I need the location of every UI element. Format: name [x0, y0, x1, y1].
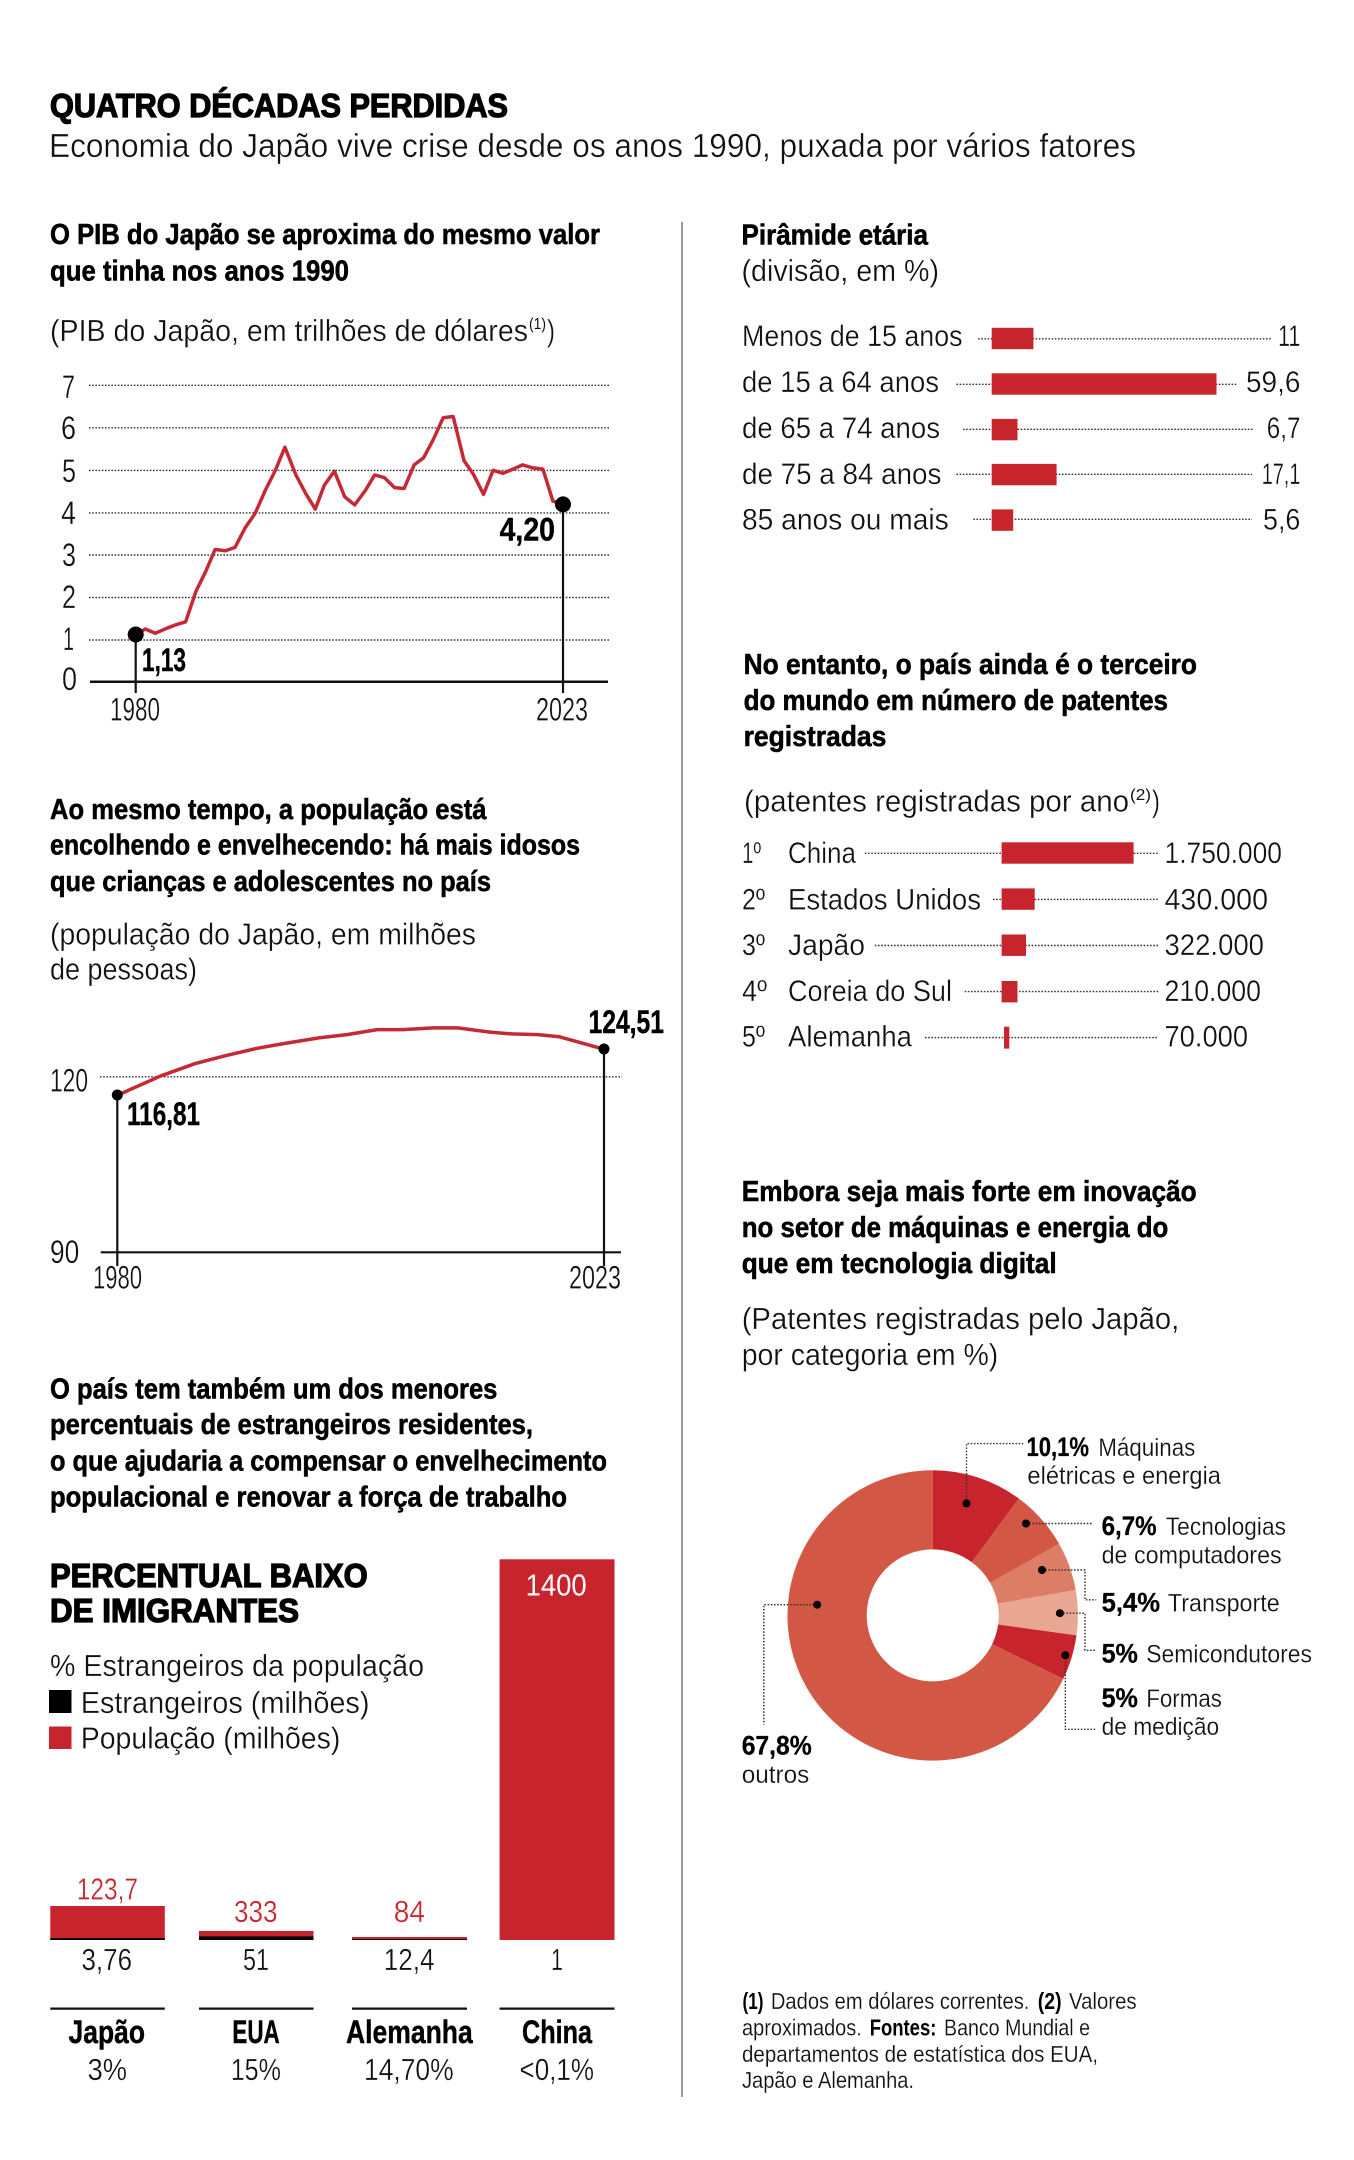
heading: pyramid: Pirâmide etária	[742, 220, 929, 252]
line chart: PIB: 1980	[110, 692, 160, 728]
footnote and sources: Banco Mundial e	[944, 2014, 1090, 2040]
bar chart: age groups	[742, 320, 1300, 536]
donut label: measurement: de medição	[1102, 1713, 1219, 1741]
bar chart: population vs foreigners: 123,7	[77, 1872, 138, 1906]
heading: patents: registradas	[744, 721, 886, 753]
footnote and sources: Japão e Alemanha.	[742, 2067, 914, 2093]
donut label: machines: 10,1%	[1026, 1432, 1089, 1462]
panel: immigrants	[49, 1374, 614, 2087]
bar chart: population vs foreigners: 51	[243, 1942, 269, 1977]
heading: patents	[744, 649, 1197, 753]
donut label: semiconductors: Semicondutores	[1146, 1640, 1312, 1668]
heading: PIB: O PIB do Japão se aproxima do mesmo valor	[50, 219, 600, 251]
footnote and sources: (2)	[1038, 1988, 1062, 2014]
bar chart: age groups: de 15 a 64 anos	[742, 366, 939, 399]
heading: PIB	[50, 219, 600, 288]
country labels	[50, 2009, 615, 2087]
heading: foreign residents: O país tem também um dos menores	[50, 1374, 497, 1406]
bar chart: age groups: 17,1	[1262, 458, 1300, 491]
bar chart: patents ranking: Alemanha	[788, 1020, 913, 1054]
bar chart: patents ranking: 5º	[742, 1020, 765, 1054]
donut label: semiconductors	[1102, 1638, 1312, 1668]
line chart: PIB: 1,13	[142, 642, 186, 678]
heading: foreign residents: populacional e renovar a força de trabalho	[50, 1482, 567, 1514]
donut label: others: 67,8%	[742, 1731, 812, 1761]
line chart: population: 90	[50, 1234, 79, 1270]
bar chart: patents ranking: 430.000	[1164, 884, 1268, 916]
country labels: 3%	[88, 2052, 127, 2087]
heading: patents: No entanto, o país ainda é o terceiro	[744, 649, 1197, 681]
text: patents units: (patentes registradas por ano	[744, 784, 1129, 818]
line chart: PIB: 2023	[536, 692, 588, 728]
legend: % Estrangeiros da população	[50, 1648, 424, 1683]
footnote and sources: Fontes:	[870, 2014, 936, 2040]
line chart: PIB: 2	[62, 579, 76, 615]
donut label: measurement	[1102, 1683, 1222, 1741]
chart title	[50, 1557, 368, 1629]
footnote and sources: Valores	[1069, 1988, 1137, 2014]
bar chart: patents ranking	[742, 837, 1282, 1054]
country labels: China	[522, 2014, 592, 2050]
bar chart: age groups: de 75 a 84 anos	[742, 458, 941, 491]
footnote and sources: departamentos de estatística dos EUA,	[742, 2041, 1098, 2067]
footnote and sources: Dados em dólares correntes.	[771, 1988, 1029, 2014]
bar chart: population vs foreigners: 1400	[526, 1568, 587, 1603]
heading: population: que crianças e adolescentes no país	[50, 866, 491, 898]
line chart: PIB	[61, 369, 609, 728]
heading: patents: do mundo em número de patentes	[744, 685, 1168, 717]
line chart: population: 1980	[93, 1260, 142, 1296]
subtitle: Economia do Japão vive crise desde os anos 1990, puxada por vários fatores	[49, 127, 1136, 164]
text: patents units: )	[1152, 784, 1160, 818]
text: population units	[50, 917, 476, 987]
donut label: computers: Tecnologias	[1166, 1513, 1286, 1541]
donut label: measurement: 5%	[1102, 1683, 1138, 1713]
heading: population: Ao mesmo tempo, a população está	[50, 794, 487, 826]
donut label: transport	[1102, 1587, 1280, 1617]
footnote and sources	[742, 1988, 1137, 2093]
text: categories units: (Patentes registradas pelo Japão,	[742, 1301, 1179, 1336]
donut label: computers: de computadores	[1102, 1542, 1282, 1570]
line chart: PIB: 5	[62, 453, 76, 489]
bar chart: age groups: de 65 a 74 anos	[742, 412, 940, 445]
country labels: Japão	[68, 2014, 145, 2050]
donut label: others: outros	[742, 1761, 809, 1789]
bar chart: age groups: 5,6	[1263, 504, 1300, 536]
panel: age pyramid	[742, 220, 1300, 536]
bar chart: age groups: 85 anos ou mais	[742, 504, 949, 536]
bar chart: patents ranking: 70.000	[1164, 1020, 1248, 1054]
country labels: 15%	[231, 2052, 281, 2087]
heading: categories: que em tecnologia digital	[742, 1248, 1057, 1280]
bar chart: patents ranking: 4º	[742, 975, 767, 1008]
bar chart: population vs foreigners	[50, 1559, 615, 1977]
donut label: computers: 6,7%	[1102, 1511, 1157, 1541]
line chart: PIB: 7	[62, 369, 75, 405]
line chart: PIB: 1	[63, 621, 74, 657]
bar chart: population vs foreigners: 12,4	[384, 1942, 434, 1977]
bar chart: population vs foreigners: 1	[551, 1942, 563, 1977]
legend: Estrangeiros (milhões)	[81, 1685, 369, 1720]
panel: patent categories	[742, 1176, 1312, 1789]
line chart: population	[50, 1004, 664, 1296]
bar chart: age groups: 59,6	[1246, 366, 1300, 399]
donut label: machines: elétricas e energia	[1027, 1462, 1221, 1490]
donut label: machines: Máquinas	[1098, 1434, 1195, 1462]
text: patents units: (2)	[1130, 787, 1151, 804]
text: pyramid units: (divisão, em %)	[742, 253, 939, 288]
text: PIB units: (PIB do Japão, em trilhões de dólares	[50, 313, 528, 348]
footnote and sources: aproximados.	[742, 2014, 862, 2040]
chart title: PERCENTUAL BAIXO	[50, 1557, 368, 1594]
bar chart: age groups: 11	[1278, 320, 1300, 353]
legend: População (milhões)	[81, 1720, 340, 1755]
country labels: <0,1%	[520, 2052, 594, 2087]
heading: categories	[742, 1176, 1197, 1280]
donut label: others	[742, 1731, 812, 1789]
bar chart: age groups: Menos de 15 anos	[742, 320, 962, 353]
line chart: PIB: 6	[61, 410, 76, 446]
bar chart: patents ranking: 2º	[742, 884, 765, 916]
text: population units: (população do Japão, em milhões	[50, 917, 476, 952]
heading: foreign residents	[50, 1374, 607, 1514]
line chart: PIB: 3	[62, 537, 76, 573]
heading: foreign residents: percentuais de estrangeiros residentes,	[50, 1409, 533, 1441]
bar chart: patents ranking: 1.750.000	[1164, 837, 1282, 870]
donut label: transport: Transporte	[1168, 1589, 1280, 1617]
bar chart: patents ranking: 210.000	[1164, 975, 1261, 1008]
donut label: measurement: Formas	[1146, 1685, 1222, 1713]
bar chart: population vs foreigners: 333	[234, 1894, 278, 1929]
line chart: population: 116,81	[127, 1096, 200, 1132]
donut chart	[764, 1444, 1096, 1761]
donut label: semiconductors: 5%	[1102, 1638, 1138, 1668]
text: categories units: por categoria em %)	[742, 1337, 998, 1372]
bar chart: patents ranking: Coreia do Sul	[788, 975, 952, 1008]
bar chart: age groups: 6,7	[1267, 412, 1300, 445]
donut label: machines	[1026, 1432, 1221, 1490]
text: population units: de pessoas)	[50, 952, 197, 987]
country labels: 14,70%	[364, 2052, 454, 2087]
bar chart: patents ranking: 3º	[742, 929, 765, 962]
line chart: population: 124,51	[588, 1004, 664, 1040]
country labels: Alemanha	[346, 2014, 473, 2050]
panel: patents	[742, 649, 1282, 1054]
text: categories units	[742, 1301, 1179, 1372]
heading: PIB: que tinha nos anos 1990	[50, 256, 349, 288]
chart title: DE IMIGRANTES	[50, 1592, 299, 1629]
line chart: population: 2023	[569, 1260, 621, 1296]
bar chart: population vs foreigners: 84	[394, 1894, 425, 1929]
heading: foreign residents: o que ajudaria a compensar o envelhecimento	[50, 1446, 607, 1478]
line chart: PIB: 4,20	[500, 512, 555, 548]
donut label: computers	[1102, 1511, 1286, 1570]
donut label: transport: 5,4%	[1102, 1587, 1160, 1617]
bar chart: population vs foreigners: 3,76	[82, 1942, 132, 1977]
country labels: EUA	[232, 2014, 280, 2050]
bar chart: patents ranking: Estados Unidos	[788, 884, 981, 916]
title: QUATRO DÉCADAS PERDIDAS	[50, 87, 508, 124]
panel: PIB chart	[50, 219, 609, 728]
heading: categories: no setor de máquinas e energia do	[742, 1212, 1168, 1244]
text: PIB units: (1)	[529, 316, 546, 333]
heading: population	[50, 794, 580, 898]
line chart: population: 120	[50, 1062, 88, 1098]
bar chart: patents ranking: China	[788, 837, 857, 870]
bar chart: patents ranking: Japão	[788, 929, 865, 962]
line chart: PIB: 4	[61, 495, 76, 531]
heading: categories: Embora seja mais forte em inovação	[742, 1176, 1197, 1208]
panel: population chart	[50, 794, 664, 1296]
line chart: PIB: 0	[62, 661, 77, 697]
heading: population: encolhendo e envelhecendo: há mais idosos	[50, 830, 580, 862]
text: PIB units: )	[547, 313, 555, 348]
bar chart: patents ranking: 322.000	[1164, 929, 1264, 962]
bar chart: patents ranking: 1º	[742, 837, 761, 870]
legend	[49, 1648, 424, 1755]
footnote and sources: (1)	[742, 1988, 763, 2014]
